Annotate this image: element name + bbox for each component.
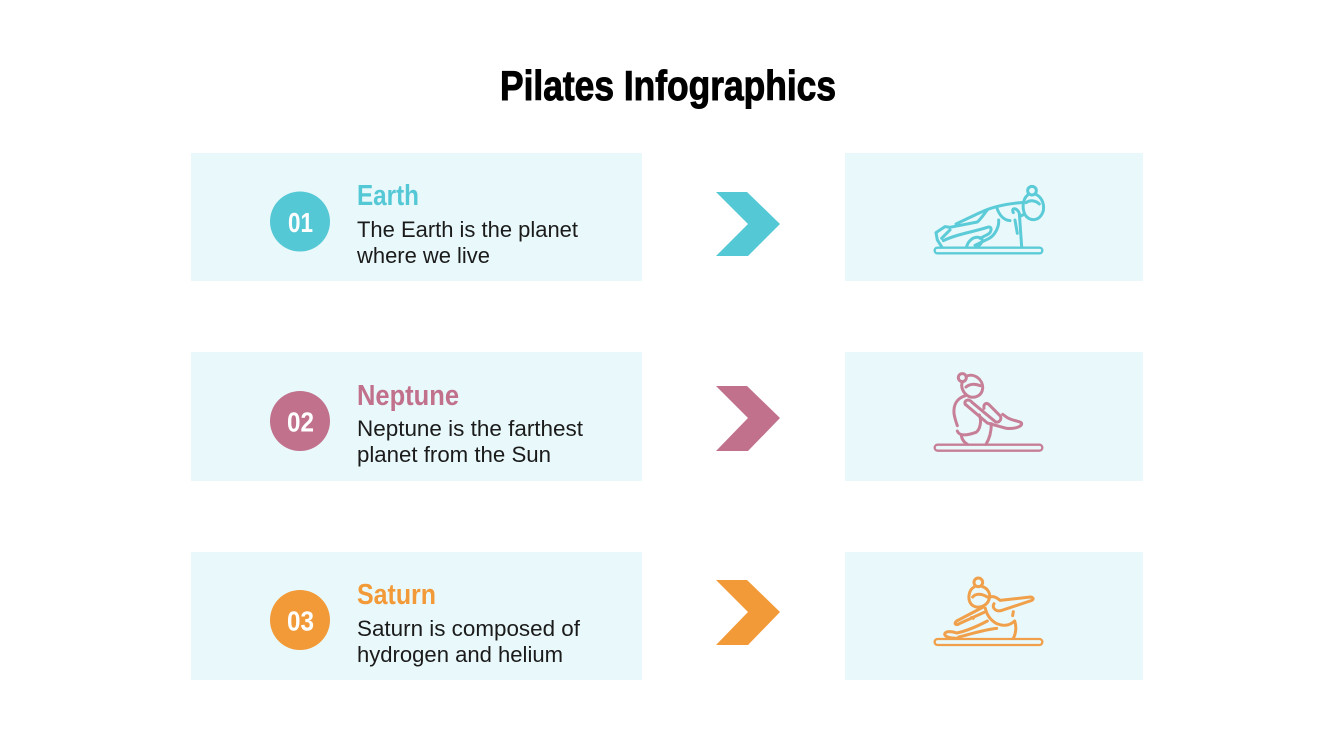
row 3: Saturn <box>191 552 1143 680</box>
panel: Saturn icon <box>845 552 1143 680</box>
badge 01 <box>270 192 330 252</box>
arrow 3 <box>716 580 780 645</box>
arrow 2 <box>716 386 780 451</box>
icon: plank pose <box>935 186 1044 253</box>
row 2: Neptune <box>191 352 1143 481</box>
panel: Neptune icon <box>845 352 1143 481</box>
badge 02: 02 <box>287 406 314 438</box>
text: Earth description: The Earth is the planet <box>357 217 578 242</box>
panel: Earth icon <box>845 153 1143 281</box>
heading: Neptune: Neptune <box>357 380 459 412</box>
heading: Saturn: Saturn <box>357 579 436 611</box>
arrow 1 <box>716 192 780 256</box>
title: Pilates Infographics <box>500 62 836 109</box>
text: Saturn description: hydrogen and helium <box>357 642 563 667</box>
icon: seated pose <box>935 374 1042 451</box>
badge 02 <box>270 391 330 451</box>
heading: Earth: Earth <box>357 180 419 212</box>
text: Saturn description: Saturn is composed of <box>357 616 581 641</box>
text: Neptune description: Neptune is the farthest <box>357 416 583 441</box>
panel: Earth text <box>191 153 642 281</box>
icon: side stretch pose <box>935 578 1042 645</box>
panel: Neptune text <box>191 352 642 481</box>
badge 03: 03 <box>287 606 314 636</box>
badge 01: 01 <box>288 207 313 238</box>
text: Neptune description: planet from the Sun <box>357 442 551 467</box>
panel: Saturn text <box>191 552 642 680</box>
text: Earth description: where we live <box>356 243 490 268</box>
badge 03 <box>270 590 330 650</box>
row 1: Earth <box>191 153 1143 281</box>
